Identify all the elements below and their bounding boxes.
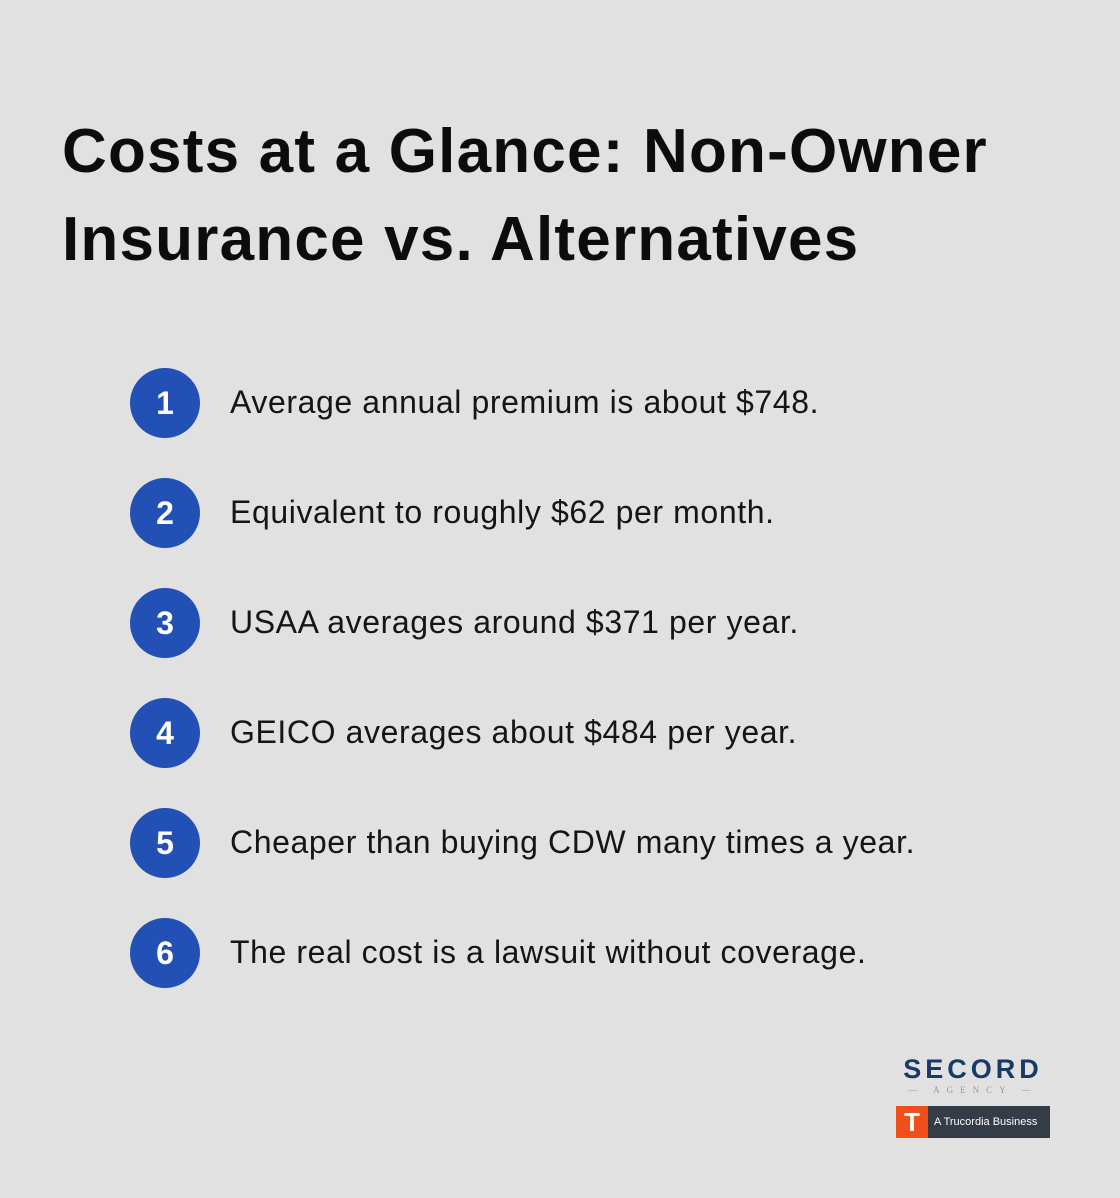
item 2: Equivalent to roughly $62 per month.	[230, 494, 775, 530]
item 5: 5	[156, 825, 174, 861]
item 4: 4	[156, 715, 174, 751]
logo: A Trucordia Business	[934, 1116, 1037, 1128]
item 3	[130, 588, 799, 658]
logo: SECORD	[903, 1054, 1043, 1084]
title: Costs at a Glance: Non-Owner	[62, 117, 988, 186]
item 3: 3	[156, 605, 174, 641]
item 1: Average annual premium is about $748.	[230, 384, 819, 420]
item 3: USAA averages around $371 per year.	[230, 604, 799, 640]
item 1: 1	[156, 385, 174, 421]
item 5: Cheaper than buying CDW many times a year.	[230, 824, 915, 860]
item 6	[130, 918, 866, 988]
item 6: 6	[156, 935, 174, 971]
logo: T	[904, 1107, 920, 1137]
title	[62, 117, 988, 274]
item 2	[130, 478, 775, 548]
item 2: 2	[156, 495, 174, 531]
logo: — AGENCY —	[908, 1085, 1038, 1095]
item 1	[130, 368, 819, 438]
item 4: GEICO averages about $484 per year.	[230, 714, 797, 750]
item 5	[130, 808, 915, 878]
item 6: The real cost is a lawsuit without coverage.	[230, 934, 866, 970]
item 4	[130, 698, 797, 768]
logo	[896, 1054, 1050, 1138]
title: Insurance vs. Alternatives	[62, 205, 859, 274]
